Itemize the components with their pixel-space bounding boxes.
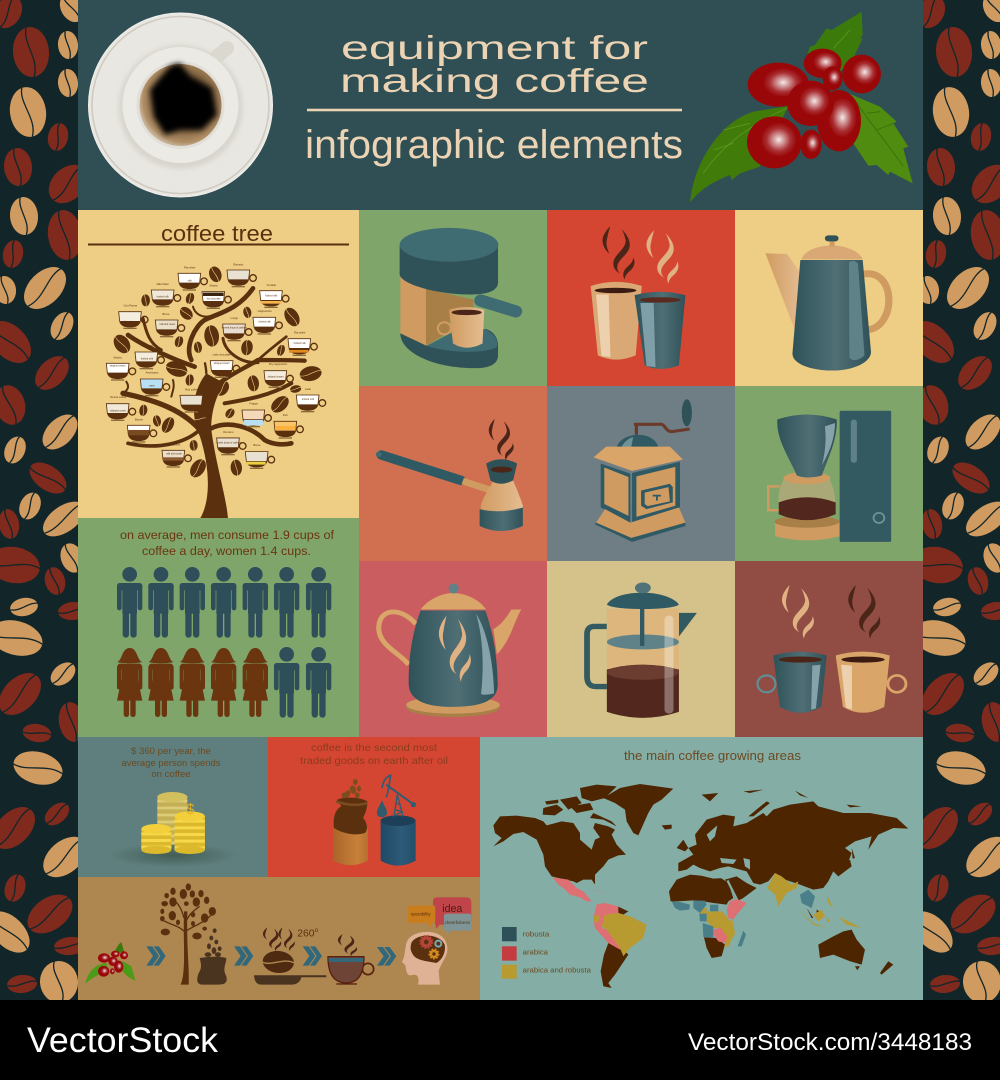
tree illustration with cups: frothed milk — [302, 398, 315, 401]
tree illustration with cups: Mocha — [210, 284, 218, 288]
tree illustration with cups: Breve — [254, 443, 261, 447]
tree illustration with cups: Frappe — [249, 402, 258, 406]
title: equipment for — [341, 29, 648, 66]
tree illustration with cups: double drops of caffeine — [216, 441, 242, 444]
text: second most traded — [300, 742, 448, 767]
icon: head with gears and ideas — [402, 897, 471, 985]
icon: roasting bean in pan — [254, 927, 326, 985]
tree illustration with cups: whipped cream — [110, 365, 126, 368]
text: second most traded: coffee is the second most — [311, 742, 437, 754]
tree illustration with cups: Flat white — [184, 265, 196, 269]
legend: arabica and robusta — [523, 966, 592, 975]
footer: watermark: VectorStock — [27, 1021, 219, 1060]
tree illustration with cups: Con Panna — [124, 304, 137, 308]
bean pattern: right strip — [923, 0, 1000, 1000]
pictogram: men and women — [117, 567, 331, 718]
text: second most traded: traded goods on earth after oil — [300, 755, 448, 767]
icon: coffee bag cylinder vs oil barrel — [333, 775, 416, 866]
tree illustration with cups: Latte chocolate — [213, 353, 231, 357]
tree illustration with cups: whipped cream — [268, 375, 284, 378]
tree illustration with cups: Flat white — [294, 330, 306, 334]
tree illustration with cups: frothed milk — [259, 321, 271, 324]
tree illustration with cups: milk and cream — [159, 323, 175, 326]
text: $360 per year: $ 360 per year, the — [131, 746, 211, 757]
bean pattern: left strip — [0, 0, 78, 1000]
tree illustration with cups: Romano — [223, 430, 234, 434]
tree illustration with cups: Vienna coffee — [110, 395, 127, 399]
tree illustration with cups: Red coffee — [185, 387, 199, 391]
panel: cups per day people chart — [78, 518, 359, 737]
tree illustration with cups: Marocchino — [166, 442, 181, 446]
icon: mini coffee tree with bag — [160, 883, 227, 985]
icon: coin stacks — [108, 792, 238, 867]
tree illustration with cups: frothed milk — [265, 295, 278, 298]
panel: header — [78, 0, 923, 210]
tree illustration with cups: frothed milk — [157, 295, 170, 298]
text: roasting temperature: 260 — [297, 928, 315, 939]
footer: watermark — [27, 1021, 972, 1060]
arrow: double chevrons 4 — [377, 947, 396, 966]
icon: coin stacks: $ — [186, 802, 194, 818]
tree illustration with cups: hot chocolate — [207, 297, 221, 300]
tree illustration with cups: Macchiato — [141, 344, 154, 348]
tree illustration with cups: Bicerin — [135, 417, 144, 421]
tree illustration with cups: Macchiato — [157, 282, 169, 286]
tree illustration with cups: Breve — [163, 312, 170, 316]
tree illustration with cups: Cappuccino — [258, 309, 272, 313]
icon: mini berries — [85, 942, 135, 984]
icon: two mugs with steam — [757, 585, 906, 713]
tree illustration with cups: milk and cream — [166, 452, 182, 455]
arrow: double chevrons 3 — [303, 946, 322, 966]
panel: coffee growing areas map — [480, 737, 923, 1000]
icon: head with gears and ideas: idea — [442, 903, 462, 915]
title: making coffee — [340, 62, 649, 99]
icon: espresso machine — [400, 228, 516, 368]
arrow: double chevrons 1 — [146, 946, 166, 966]
tree illustration with cups: Ristretto — [233, 262, 244, 266]
tree illustration with cups: Cortado — [267, 283, 277, 287]
icon: french press — [587, 582, 697, 718]
legend — [502, 927, 592, 979]
heading: coffee tree: coffee tree — [161, 221, 273, 246]
tree illustration with cups — [106, 262, 326, 519]
text: consumption by gender: on average, men consume 1.9 cups of — [120, 528, 335, 542]
panel: second most traded goods — [268, 737, 480, 877]
tree illustration with cups: water — [149, 385, 155, 388]
arrow: double chevrons 2 — [234, 946, 253, 966]
text: $360 per year — [122, 746, 221, 780]
tree illustration with cups: whipped cream — [214, 362, 230, 365]
title — [305, 29, 683, 167]
tree illustration with cups: Mocha — [114, 355, 122, 359]
tree illustration with cups: frothed milk — [141, 358, 154, 361]
panel: equipment icon grid — [359, 210, 923, 737]
icon: two tall cups with steam — [591, 226, 685, 369]
heading: map: the main coffee growing areas — [624, 748, 801, 763]
tree illustration with cups: Americano — [146, 371, 159, 375]
tree illustration with cups: frothed milk — [294, 342, 306, 345]
tree illustration with cups: Latte — [305, 387, 311, 391]
panel: coffee process flow — [78, 877, 480, 1000]
tree illustration with cups: Irish — [283, 413, 288, 417]
legend: arabica — [523, 948, 549, 957]
icon: drip coffee machine — [768, 411, 891, 542]
icon: coffee grinder — [594, 399, 692, 542]
icon: head with gears and ideas: operability — [411, 912, 431, 918]
tree illustration with cups: whipped cream — [122, 321, 138, 324]
legend: robusta — [523, 929, 550, 938]
text: $360 per year: average person spends — [122, 758, 221, 769]
title: infographic elements — [305, 123, 683, 167]
text: consumption by gender — [120, 528, 335, 558]
icon: coffee berries and leaves — [690, 12, 913, 202]
panel: annual spend on coffee — [78, 737, 268, 877]
text: consumption by gender: coffee a day, women 1.4 cups. — [142, 544, 311, 558]
world map — [493, 784, 908, 988]
icon: cup of coffee — [328, 934, 374, 985]
icon: coffee cup on saucer from above — [88, 13, 272, 197]
icon: kettle — [379, 583, 521, 717]
text: roasting temperature: o — [315, 927, 319, 934]
icon: coffee pot — [765, 235, 889, 371]
tree illustration with cups: Lungo — [231, 316, 239, 320]
tree illustration with cups: whipped cream — [110, 409, 126, 412]
footer: watermark: VectorStock.com/3448183 — [688, 1029, 972, 1056]
icon: head with gears and ideas: cheerfulness — [445, 920, 470, 926]
text: $360 per year: on coffee — [151, 769, 191, 780]
icon: cezve with steam — [376, 419, 523, 531]
tree illustration with cups: several drops of caffeine — [222, 326, 248, 329]
tree illustration with cups: milk — [188, 280, 193, 282]
panel: coffee tree — [78, 210, 359, 519]
tree illustration with cups: Dry cappuccino — [269, 362, 288, 366]
